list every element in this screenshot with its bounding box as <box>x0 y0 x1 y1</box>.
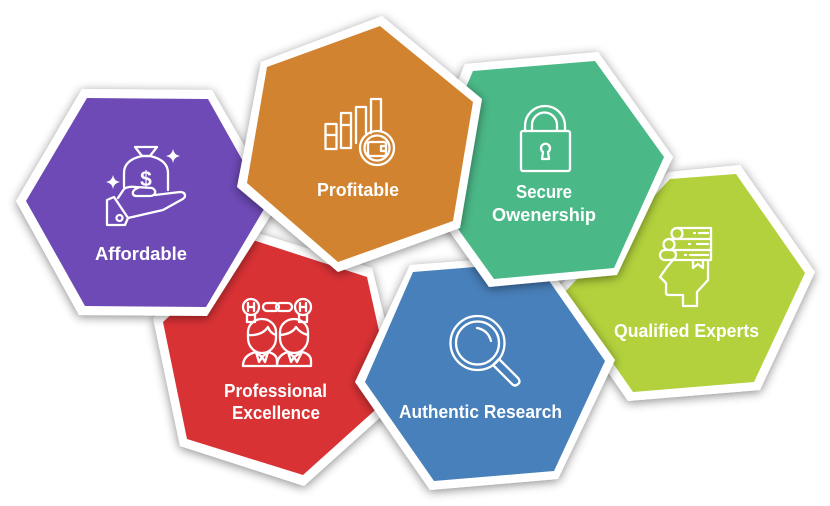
label: Affordable <box>95 244 187 264</box>
icon: two people with linked ideas <box>243 299 311 366</box>
label: Excellence <box>232 403 320 423</box>
label: Owenership <box>492 205 596 225</box>
icon: hand holding money bag <box>107 147 185 225</box>
label: Authentic Research <box>399 402 562 422</box>
label: Secure <box>516 182 572 202</box>
icon: bar chart with wallet <box>326 99 394 165</box>
icon: head with books <box>660 228 711 306</box>
label: Qualified Experts <box>614 321 759 341</box>
icon: dollar sign: $ <box>140 168 152 191</box>
label: Professional <box>224 381 327 401</box>
icon: sparkle right <box>166 149 180 163</box>
icon: padlock <box>521 106 570 171</box>
panel: professional excellence <box>153 231 404 486</box>
panel: authentic research <box>355 255 615 490</box>
icon: magnifying glass <box>450 316 520 386</box>
panel: profitable <box>237 16 482 272</box>
panel: affordable <box>16 89 278 316</box>
label: Profitable <box>317 180 399 200</box>
panel: qualified experts <box>553 165 815 401</box>
icon: sparkle left <box>106 175 120 189</box>
panel: secure ownership <box>415 52 673 287</box>
